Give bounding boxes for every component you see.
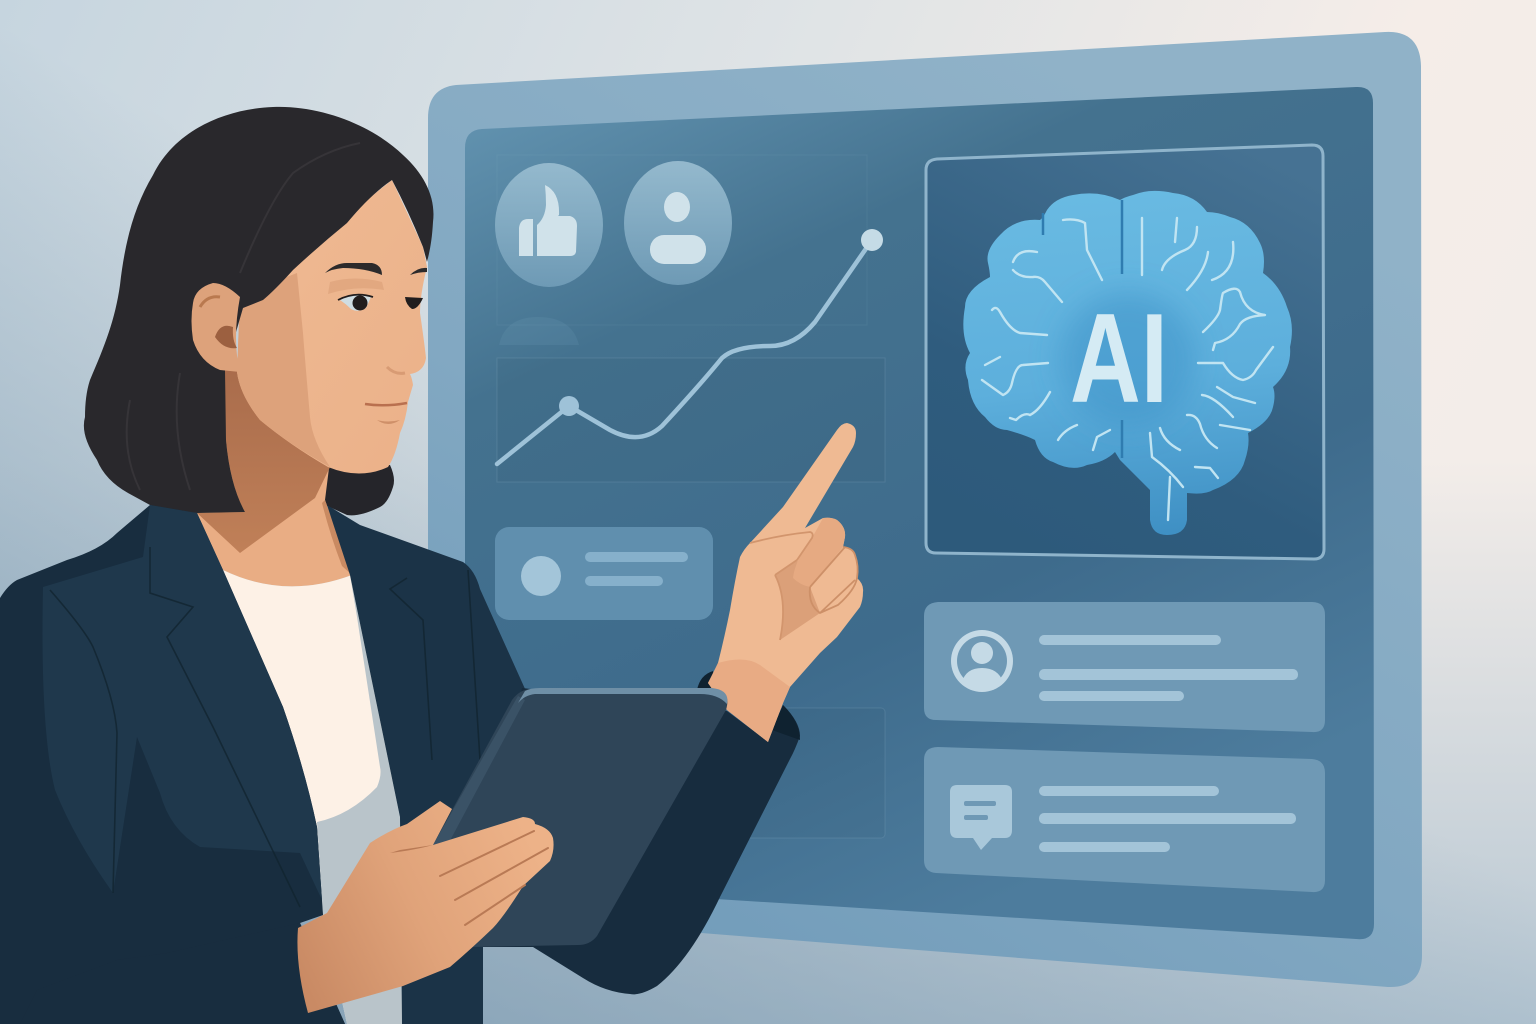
fingers	[793, 518, 845, 587]
ear	[192, 283, 240, 372]
nose shadow	[387, 367, 405, 373]
face	[237, 180, 427, 474]
neck	[197, 360, 352, 586]
tablet	[433, 688, 727, 947]
hair back right	[320, 460, 394, 515]
card: profile list	[924, 602, 1325, 732]
eyes	[340, 295, 371, 311]
AI label: AI	[1070, 288, 1168, 430]
faint chart area grid	[497, 155, 885, 838]
icon: user profile	[624, 161, 732, 285]
panel: outer glass screen	[428, 32, 1422, 987]
person: presenter	[0, 107, 863, 1024]
sleeve cuff	[697, 671, 800, 740]
icon: thumbs up	[495, 163, 603, 287]
panel: AI brain frame	[926, 145, 1324, 559]
blazer body left	[0, 505, 345, 1024]
hair	[84, 107, 433, 513]
lips	[365, 403, 407, 424]
brain centre divide	[1043, 200, 1122, 458]
card: small status card	[495, 527, 713, 620]
line chart	[497, 229, 883, 464]
faded circle behind chart	[499, 317, 579, 345]
hand holding tablet	[297, 801, 554, 1013]
icon: brain	[963, 191, 1292, 535]
panel: inner dashboard	[465, 87, 1374, 939]
neck shadow	[197, 360, 330, 553]
shirt shadow	[317, 575, 402, 1024]
blazer body right	[327, 505, 530, 1024]
face side shade	[237, 273, 330, 467]
card: message list	[924, 747, 1325, 892]
shirt	[223, 570, 402, 1024]
wrist shade	[708, 659, 790, 742]
pointing hand	[708, 423, 863, 742]
palm shadow	[775, 560, 820, 640]
hair strands	[127, 143, 360, 490]
eyebrows	[325, 263, 382, 275]
brain folds	[982, 218, 1273, 520]
blazer sleeve (pointing arm)	[483, 688, 800, 994]
